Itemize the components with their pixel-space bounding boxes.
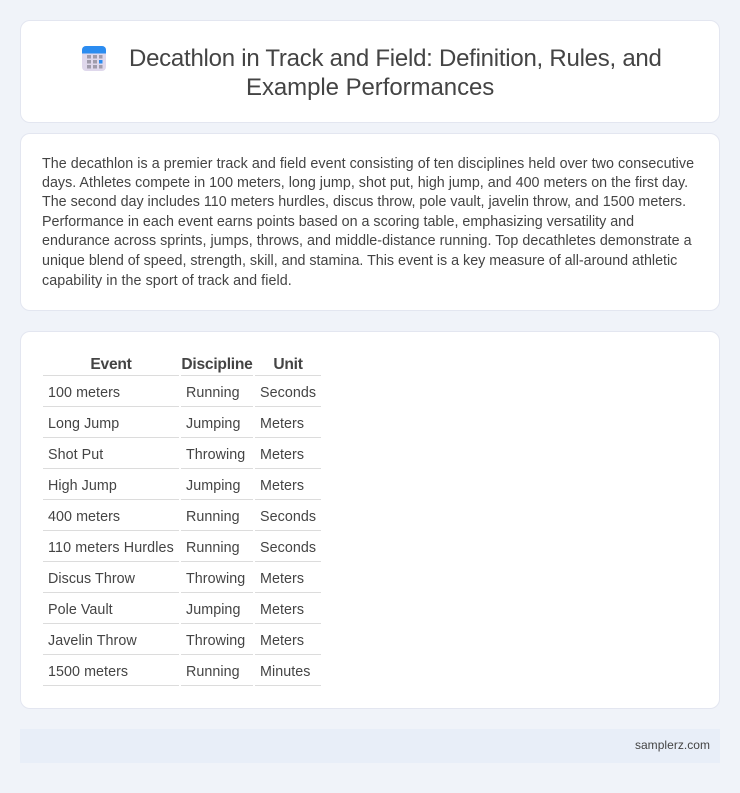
row: discus throw: Throwing: [186, 571, 245, 587]
row: long jump: Meters: [260, 416, 304, 432]
icon: calendar: [82, 46, 106, 71]
row: javelin throw: Javelin Throw: [48, 633, 137, 649]
table: decathlon events: [43, 356, 321, 686]
row: 1500 meters: 1500 meters: [48, 664, 128, 680]
row: long jump: [43, 416, 321, 438]
row: long jump: Long Jump: [48, 416, 119, 432]
text block: description: endurance across sprints, jumps, throws, and middle-distance running. Top decathletes demonstrate a: [42, 233, 692, 249]
table header: Unit: [273, 356, 303, 373]
row: long jump: Jumping: [186, 416, 240, 432]
row: 110 meters hurdles: [43, 540, 321, 562]
row: discus throw: Meters: [260, 571, 304, 587]
table header: Discipline: [181, 356, 253, 373]
row: 1500 meters: Running: [186, 664, 240, 680]
row: 400 meters: Running: [186, 509, 240, 525]
text block: description: days. Athletes compete in 100 meters, long jump, shot put, high jump, and 400 meters on the first day.: [42, 175, 688, 191]
footer text: samplerz.com: [635, 738, 710, 752]
text block: description: The decathlon is a premier track and field event consisting of ten disciplines held over two consecutive: [42, 156, 694, 172]
row: discus throw: [43, 571, 321, 593]
row: pole vault: Meters: [260, 602, 304, 618]
row: discus throw: Discus Throw: [48, 571, 135, 587]
title: Example Performances: [246, 74, 494, 101]
row: high jump: Jumping: [186, 478, 240, 494]
row: shot put: Meters: [260, 447, 304, 463]
row: pole vault: Pole Vault: [48, 602, 113, 618]
text block: description: The second day includes 110 meters hurdles, discus throw, pole vault, javelin throw, and 1500 meters.: [42, 194, 686, 210]
panel: table card: [20, 331, 720, 709]
panel: title card: [20, 20, 720, 123]
row: javelin throw: [43, 633, 321, 655]
row: 100 meters: 100 meters: [48, 385, 120, 401]
title: Decathlon in Track and Field: Definition, Rules, and: [129, 45, 662, 72]
row: shot put: Throwing: [186, 447, 245, 463]
row: shot put: [43, 447, 321, 469]
row: 1500 meters: Minutes: [260, 664, 310, 680]
row: 110 meters hurdles: Running: [186, 540, 240, 556]
row: 400 meters: [43, 509, 321, 531]
row: shot put: Shot Put: [48, 447, 103, 463]
title: [129, 45, 662, 101]
row: javelin throw: Meters: [260, 633, 304, 649]
text block: description: unique blend of speed, strength, skill, and stamina. This event is a key measure of all-around athletic: [42, 253, 677, 269]
row: 1500 meters: [43, 664, 321, 686]
row: pole vault: [43, 602, 321, 624]
row: 110 meters hurdles: Seconds: [260, 540, 316, 556]
row: high jump: Meters: [260, 478, 304, 494]
row: high jump: High Jump: [48, 478, 117, 494]
text block: description: Performance in each event earns points based on a scoring table, emphasizing versatility and: [42, 214, 634, 230]
row: 110 meters hurdles: 110 meters Hurdles: [48, 540, 174, 556]
table header: [43, 356, 321, 376]
row: 100 meters: Running: [186, 385, 240, 401]
row: javelin throw: Throwing: [186, 633, 245, 649]
footer bar: [20, 729, 720, 763]
row: pole vault: Jumping: [186, 602, 240, 618]
row: 100 meters: [43, 385, 321, 407]
row: 400 meters: Seconds: [260, 509, 316, 525]
table header: Event: [90, 356, 132, 373]
row: 400 meters: 400 meters: [48, 509, 120, 525]
row: high jump: [43, 478, 321, 500]
row: 100 meters: Seconds: [260, 385, 316, 401]
panel: description card: [20, 133, 720, 311]
text block: description: capability in the sport of track and field.: [42, 273, 292, 289]
text block: description: [42, 156, 694, 289]
